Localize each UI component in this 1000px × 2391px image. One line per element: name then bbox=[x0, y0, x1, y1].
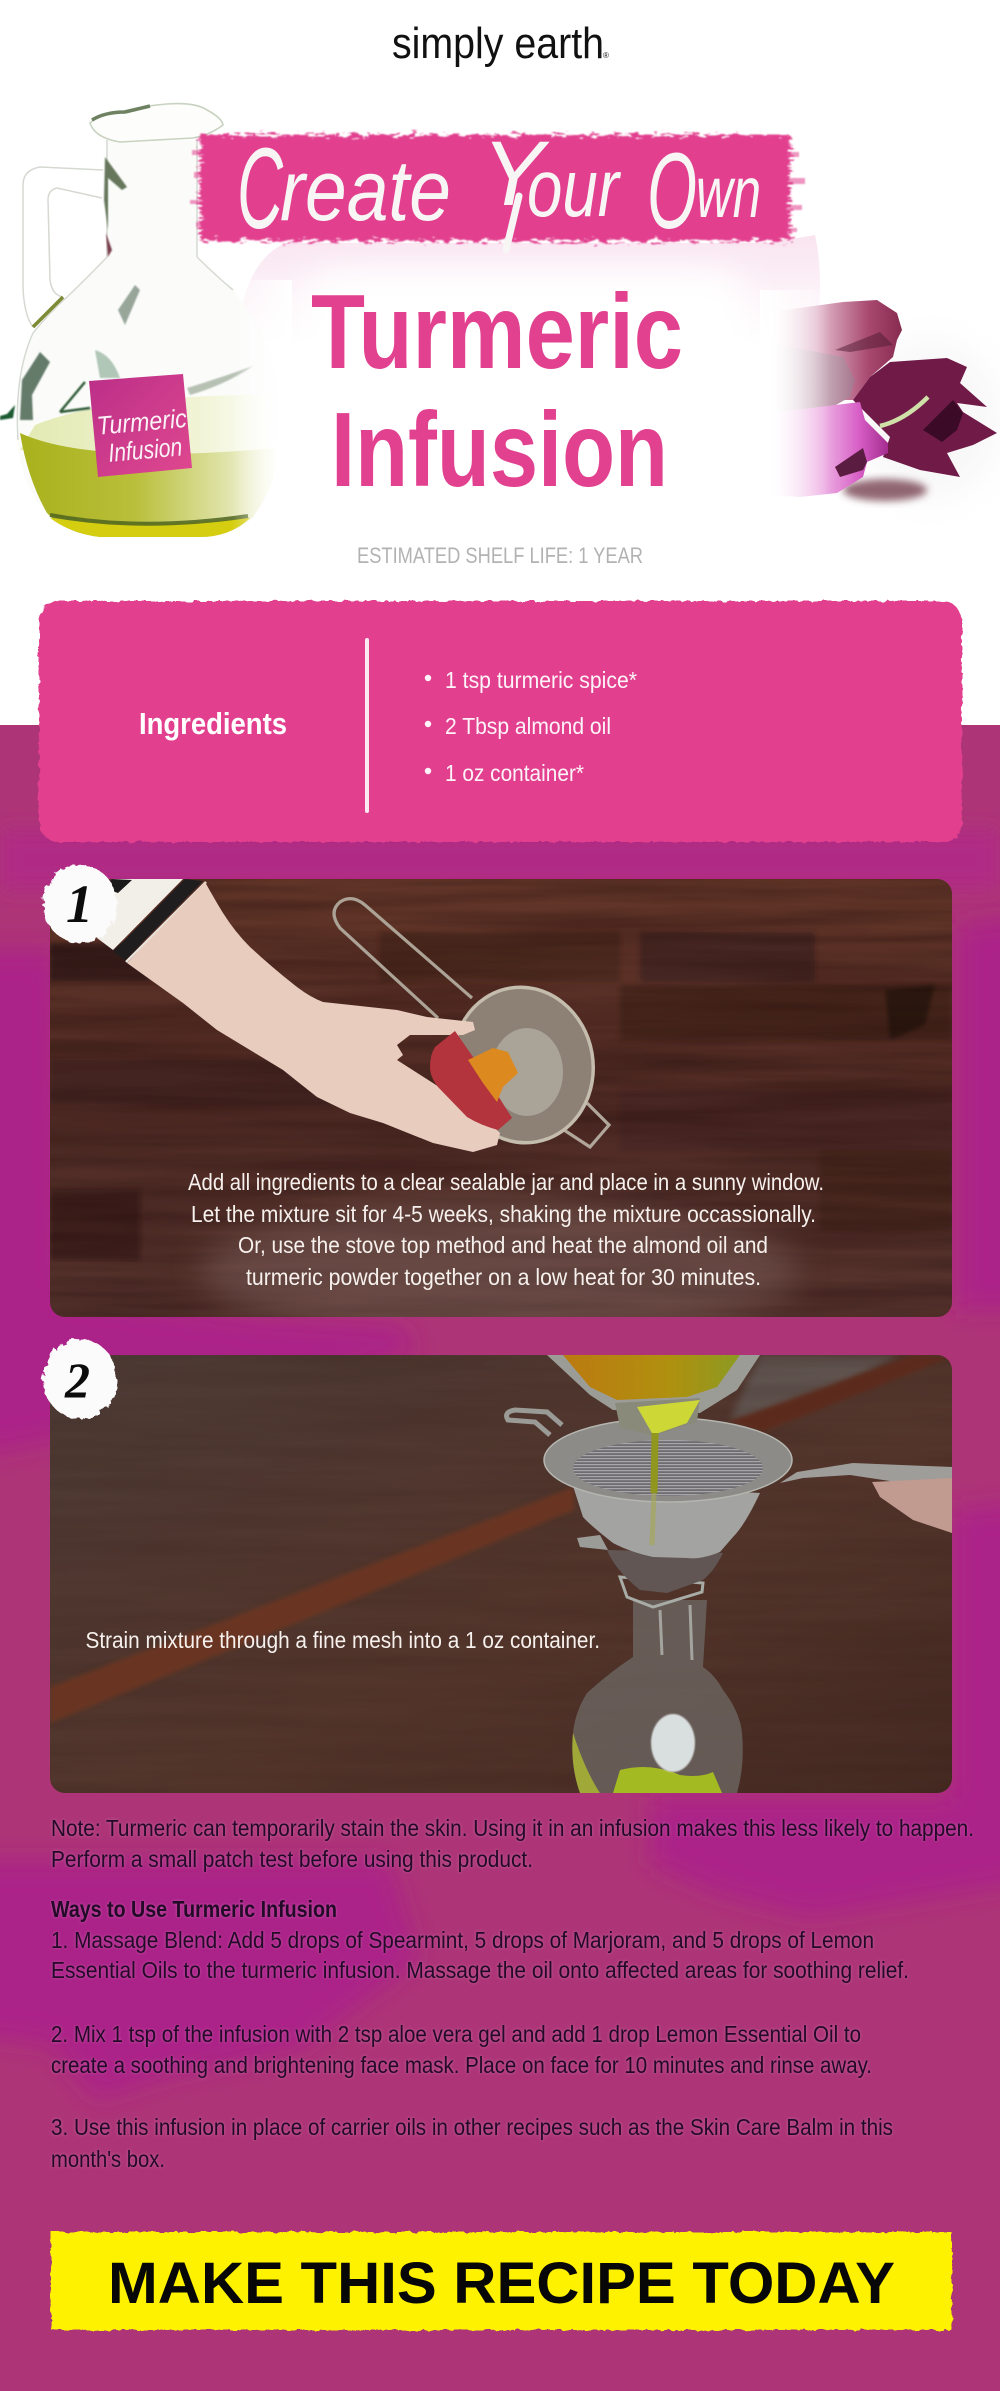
logo: simply earth: simply earth bbox=[392, 19, 604, 68]
ways to use text block bbox=[51, 1896, 909, 2172]
button: make this recipe today bbox=[51, 2232, 952, 2330]
pan wire handle bbox=[334, 899, 472, 1018]
step 2 text: Strain mixture through a fine mesh into a 1 oz container. bbox=[86, 1627, 600, 1653]
banner heading: Create Your Own: our bbox=[527, 143, 622, 234]
jar leaves bbox=[0, 157, 253, 420]
banner heading: Create Your Own: wn bbox=[696, 153, 761, 233]
ways to use text block: Essential Oils to the turmeric infusion. Massage the oil onto affected areas for soothing relief. bbox=[51, 1957, 909, 1983]
strainer bbox=[507, 1410, 952, 1558]
title: Turmeric Infusion: Infusion bbox=[331, 391, 668, 509]
wood table bbox=[50, 879, 952, 1340]
title: Turmeric Infusion bbox=[311, 273, 683, 509]
sleeve bbox=[97, 879, 206, 962]
jar label: Turmeric bbox=[96, 403, 188, 441]
bottle bbox=[572, 1577, 743, 1793]
ways to use text block: 3. Use this infusion in place of carrier oils in other recipes such as the Skin Care Balm in this bbox=[51, 2114, 893, 2140]
step 1 text: Let the mixture sit for 4-5 weeks, shaking the mixture occassionally. bbox=[191, 1201, 816, 1227]
icon: glass oil jar with label bbox=[0, 104, 292, 550]
divider bbox=[365, 638, 369, 813]
saucepan bbox=[458, 986, 595, 1144]
red cup bbox=[430, 1031, 512, 1130]
logo: simply earth: ® bbox=[603, 51, 609, 60]
ways to use text block: 1. Massage Blend: Add 5 drops of Spearmint, 5 drops of Marjoram, and 5 drops of Lemon bbox=[51, 1927, 874, 1953]
icon: tulip flower bbox=[760, 290, 1000, 510]
wood table with diagonal stripe bbox=[50, 1355, 952, 1793]
button: make this recipe today: MAKE THIS RECIPE TODAY bbox=[108, 2251, 895, 2316]
ingredient list: 1 oz container* bbox=[445, 760, 584, 786]
shelf life: ESTIMATED SHELF LIFE: 1 YEAR bbox=[357, 543, 643, 568]
ingredient list: 2 Tbsp almond oil bbox=[445, 713, 611, 739]
badge: step 2 bbox=[43, 1339, 117, 1419]
ways to use text block: month's box. bbox=[51, 2146, 165, 2172]
jar oil bbox=[20, 395, 277, 537]
step 1 text bbox=[188, 1169, 824, 1290]
banner heading: Create Your Own: reate bbox=[280, 143, 451, 239]
banner heading: Create Your Own: C bbox=[237, 125, 284, 253]
ways to use text block: create a soothing and brightening face mask. Place on face for 10 minutes and rinse away. bbox=[51, 2052, 872, 2078]
ingredients heading: Ingredients bbox=[139, 706, 287, 741]
step 1 text: Add all ingredients to a clear sealable jar and place in a sunny window. bbox=[188, 1169, 824, 1195]
spout and stream bbox=[615, 1398, 700, 1545]
ingredient list bbox=[425, 667, 637, 786]
jar label bbox=[89, 374, 192, 477]
funnel bbox=[607, 1550, 723, 1593]
glass bowl with oil bbox=[547, 1355, 760, 1413]
banner: brush stroke bbox=[190, 123, 805, 253]
banner heading: Create Your Own bbox=[237, 123, 761, 253]
jar label: Infusion bbox=[107, 431, 183, 468]
jar glass body bbox=[17, 104, 278, 537]
ingredient list: 1 tsp turmeric spice* bbox=[445, 667, 637, 693]
title: Turmeric Infusion: Turmeric bbox=[311, 273, 683, 391]
ways to use text block: 2. Mix 1 tsp of the infusion with 2 tsp aloe vera gel and add 1 drop Lemon Essential Oil to bbox=[51, 2021, 861, 2047]
badge: step 2: 2 bbox=[64, 1352, 90, 1408]
jar right fade bbox=[232, 280, 292, 550]
panel: step 2 photo bbox=[50, 1355, 952, 1793]
hand at strainer bbox=[872, 1478, 952, 1533]
note text block: Perform a small patch test before using this product. bbox=[51, 1846, 533, 1872]
badge: step 1: 1 bbox=[66, 874, 93, 934]
banner heading: Create Your Own: Y bbox=[482, 123, 550, 225]
soft pink haze behind title bbox=[238, 235, 820, 550]
panel: ingredients bbox=[39, 601, 962, 842]
turmeric spice bbox=[468, 1048, 518, 1102]
page background: white top bbox=[0, 0, 1000, 725]
hand and arm bbox=[127, 882, 500, 1152]
step 1 text: Or, use the stove top method and heat the almond oil and bbox=[238, 1232, 768, 1258]
step 1 text: turmeric powder together on a low heat for 30 minutes. bbox=[246, 1264, 761, 1290]
ways heading: Ways to Use Turmeric Infusion bbox=[51, 1896, 337, 1922]
note text block bbox=[51, 1815, 974, 1872]
banner heading: Create Your Own: O bbox=[647, 130, 697, 251]
badge: step 1 bbox=[43, 865, 117, 943]
panel: step 1 photo bbox=[50, 879, 952, 1340]
page background: purple watercolor bbox=[0, 725, 1000, 2391]
